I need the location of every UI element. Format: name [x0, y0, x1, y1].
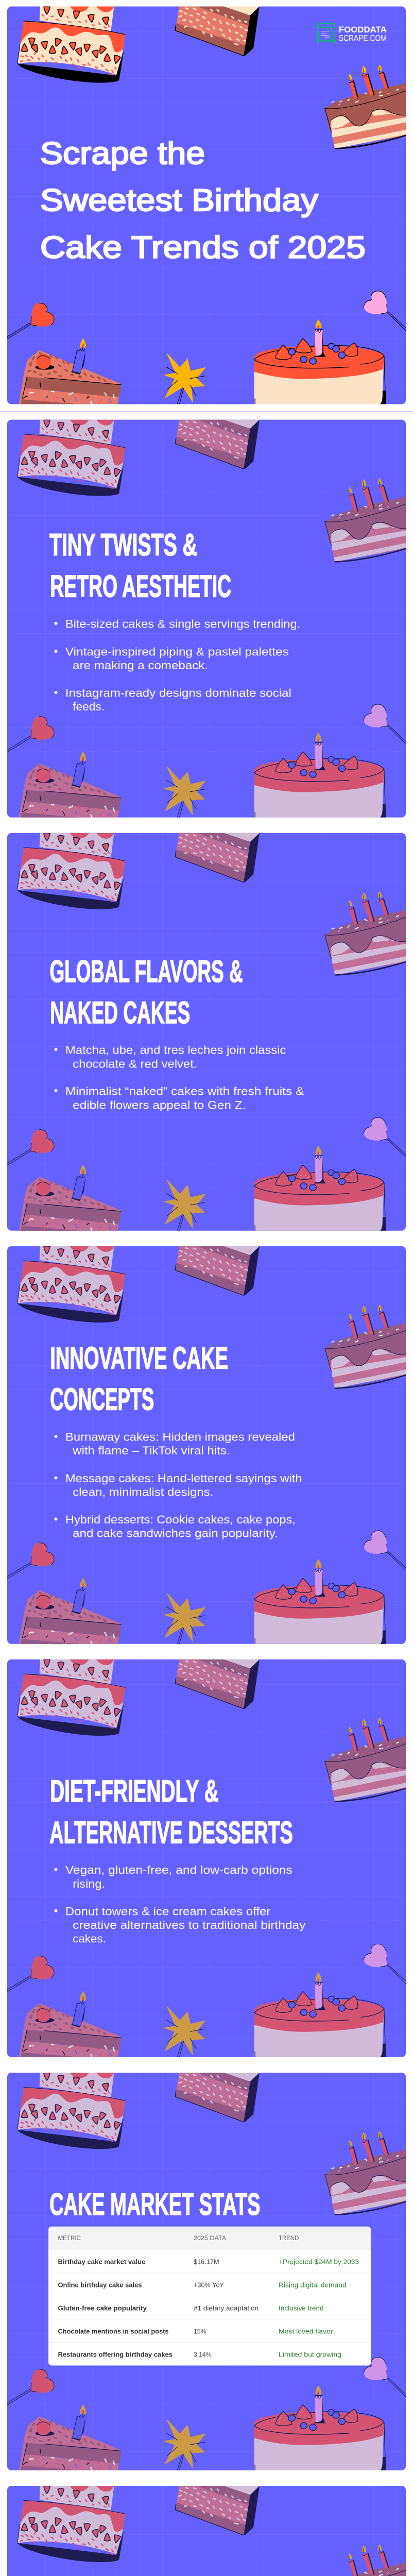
illustration: tiered strawberry cake [18, 1246, 125, 1323]
bullet list: creative alternatives to traditional birthday [73, 1919, 305, 1931]
illustration: chocolate cake with three candles [325, 891, 411, 975]
bullet list: clean, minimalist designs. [73, 1486, 213, 1499]
illustration: cake slice with cherry and candle [19, 751, 121, 819]
bullet list: and cake sandwiches gain popularity. [73, 1527, 278, 1540]
bullet list: Bite-sized cakes & single servings trending. [65, 617, 300, 630]
illustration: pink heart balloon [364, 1944, 411, 1989]
title [40, 136, 366, 265]
illustration: tiered strawberry cake [18, 6, 125, 83]
panel: 2026 outlook [7, 2486, 406, 2576]
bullet list: Burnaway cakes: Hidden images revealed [65, 1430, 295, 1443]
illustration: tiered strawberry cake [18, 2486, 125, 2562]
data table: 3.14% [194, 2350, 212, 2358]
data table: Online birthday cake sales [58, 2281, 142, 2289]
illustration: yellow sparkler star [165, 1180, 205, 1231]
panel: cake market stats [7, 2073, 406, 2470]
illustration: tiered strawberry cake [18, 2073, 125, 2149]
illustration: round cake with candle [254, 319, 386, 405]
data table: 2025 DATA [194, 2235, 226, 2242]
data table: Chocolate mentions in social posts [58, 2327, 169, 2335]
data table: Limited but growing [279, 2350, 341, 2358]
panel: title [0, 6, 413, 412]
illustration: yellow sparkler star [165, 2007, 205, 2058]
illustration: chocolate cake with three candles [325, 1718, 411, 1802]
illustration: red heart balloon [7, 1543, 54, 1579]
heading: NAKED CAKES [50, 995, 190, 1030]
illustration: round cake with candle [254, 1146, 386, 1232]
illustration: yellow sparkler star [165, 767, 205, 818]
illustration: sprinkled cake slice [175, 1659, 260, 1709]
heading: CAKE MARKET STATS [49, 2187, 260, 2222]
data table: TREND [279, 2235, 299, 2242]
heading: CONCEPTS [50, 1382, 154, 1416]
bullet list [55, 617, 300, 713]
illustration: red heart balloon [7, 1956, 54, 1992]
bullet list [55, 1044, 304, 1111]
illustration: pink heart balloon [364, 1117, 406, 1157]
bullet list: are making a comeback. [73, 659, 208, 672]
panel: global flavors and naked cakes [7, 833, 406, 1231]
illustration: round cake with candle [254, 1559, 386, 1645]
illustration: sprinkled cake slice [175, 2073, 260, 2122]
illustration: tiered strawberry cake [18, 1659, 125, 1736]
heading [50, 1341, 228, 1416]
bullet list: Minimalist “naked” cakes with fresh fruits & [65, 1085, 304, 1098]
logo: fooddata scrape small: FOODDATA [339, 25, 387, 35]
heading: RETRO AESTHETIC [50, 569, 231, 604]
heading: DIET-FRIENDLY & [50, 1774, 219, 1808]
bullet list: Message cakes: Hand-lettered sayings with [65, 1472, 302, 1485]
bullet list: Vegan, gluten-free, and low-carb options [65, 1863, 292, 1876]
illustration: pink heart balloon [364, 1530, 406, 1570]
illustration: pink heart balloon [364, 704, 406, 744]
panel: innovative cake concepts [7, 1246, 406, 1644]
illustration: sprinkled cake slice [175, 2486, 260, 2535]
illustration: tiered strawberry cake [18, 833, 125, 909]
bullet list: Donut towers & ice cream cakes offer [65, 1905, 270, 1918]
bullet list: chocolate & red velvet. [73, 1057, 197, 1070]
illustration: pink heart balloon [364, 2357, 411, 2402]
illustration: pink heart balloon [364, 291, 406, 331]
illustration: yellow sparkler star [165, 2420, 205, 2471]
heading: GLOBAL FLAVORS & [49, 954, 243, 989]
bullet list: Matcha, ube, and tres leches join classic [65, 1044, 286, 1057]
illustration: red heart balloon [7, 2369, 54, 2405]
illustration: sprinkled cake slice [175, 420, 260, 469]
bullet list: Vintage-inspired piping & pastel palettes [65, 645, 289, 658]
illustration: chocolate cake with three candles [325, 1304, 411, 1388]
heading [49, 528, 231, 604]
bullet list [55, 1430, 302, 1540]
data table: METRIC [58, 2235, 81, 2242]
illustration: round cake with candle [254, 733, 386, 819]
logo: fooddata scrape small [317, 23, 387, 43]
heading: TINY TWISTS & [49, 528, 197, 562]
data table: Gluten-free cake popularity [58, 2304, 147, 2312]
illustration: yellow sparkler star [165, 1594, 205, 1645]
title: Cake Trends of 2025 [40, 230, 366, 265]
data table: 15% [194, 2327, 206, 2335]
heading [49, 954, 243, 1030]
bullet list: Hybrid desserts: Cookie cakes, cake pops, [65, 1513, 296, 1526]
data table: +30% YoY [194, 2281, 224, 2289]
bullet list: rising. [73, 1877, 105, 1890]
illustration: chocolate cake with three candles [325, 2544, 411, 2576]
bullet list: cakes. [73, 1933, 106, 1945]
bullet list: feeds. [73, 700, 105, 713]
illustration: chocolate cake with three candles [325, 2131, 411, 2215]
panel: tiny twists and retro aesthetic [7, 419, 406, 818]
illustration: chocolate cake with three candles [325, 65, 411, 149]
illustration: yellow sparkler star [165, 354, 205, 405]
illustration: cake slice with cherry and candle [19, 1991, 121, 2059]
heading: INNOVATIVE CAKE [50, 1341, 228, 1375]
data table: #1 dietary adaptation [194, 2304, 259, 2312]
illustration: cake slice with cherry and candle [19, 1578, 121, 1645]
illustration: red heart balloon [7, 716, 54, 752]
data table: Birthday cake market value [58, 2258, 145, 2265]
illustration: tiered strawberry cake [18, 419, 125, 496]
bullet list [55, 1863, 305, 1945]
bullet list: edible flowers appeal to Gen Z. [73, 1098, 246, 1111]
illustration: red heart balloon [7, 1130, 54, 1165]
data table: +Projected $24M by 2033 [279, 2258, 359, 2265]
data table: Rising digital demand [279, 2281, 346, 2289]
illustration: sprinkled cake slice [175, 7, 260, 56]
data table: Restaurants offering birthday cakes [58, 2350, 173, 2358]
illustration: red heart balloon [7, 303, 54, 339]
title: Scrape the [40, 136, 205, 171]
illustration: cake slice with cherry and candle [19, 1165, 121, 1232]
illustration: round cake with candle [254, 1972, 386, 2059]
data table: Inclusive trend [279, 2304, 323, 2312]
panel: diet-friendly and alternative desserts [7, 1659, 406, 2057]
heading [49, 1774, 293, 1850]
bullet list: with flame – TikTok viral hits. [72, 1444, 230, 1457]
data table: $16.17M [194, 2258, 219, 2265]
illustration: cake slice with cherry and candle [19, 338, 121, 405]
title: Sweetest Birthday [40, 183, 318, 217]
illustration: sprinkled cake slice [175, 833, 260, 882]
illustration: round cake with candle [254, 2385, 386, 2472]
illustration: sprinkled cake slice [175, 1246, 260, 1296]
illustration: cake slice with cherry and candle [19, 2404, 121, 2472]
bullet list: Instagram-ready designs dominate social [65, 686, 291, 699]
data table [48, 2226, 371, 2366]
logo: fooddata scrape small: SCRAPE.COM [339, 33, 387, 43]
illustration: chocolate cake with three candles [325, 478, 411, 562]
data table: Most loved flavor [279, 2327, 333, 2335]
